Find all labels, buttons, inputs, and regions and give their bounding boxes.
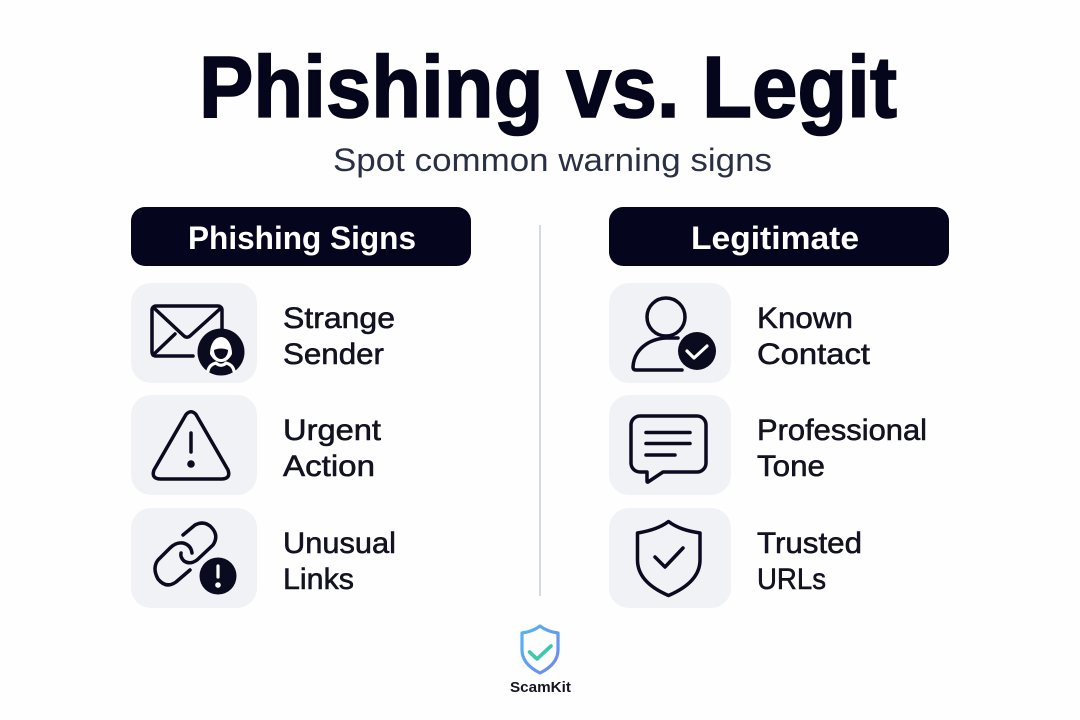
row: strange sender <box>131 283 395 383</box>
label: Contact <box>757 338 871 371</box>
icon: shield with check <box>638 522 700 596</box>
row: known contact <box>609 283 871 383</box>
label: Professional <box>757 414 927 447</box>
row: professional tone <box>609 395 927 495</box>
icon: person with check <box>633 298 716 370</box>
heading: legitimate: Legitimate <box>691 220 859 256</box>
row: unusual links <box>131 508 396 608</box>
icon: speech bubble <box>631 416 706 482</box>
label <box>283 414 382 483</box>
row: urgent action <box>131 395 382 495</box>
title: Phishing vs. Legit <box>199 39 897 136</box>
label: Known <box>757 302 853 335</box>
icon: warning triangle <box>153 412 229 479</box>
label: Links <box>283 563 354 596</box>
heading: phishing signs <box>131 207 471 266</box>
center divider <box>539 225 541 596</box>
label <box>283 527 396 596</box>
heading: phishing signs: Phishing Signs <box>188 220 416 256</box>
icon: broken chain link with alert <box>155 523 236 594</box>
icon: envelope with hooded sender <box>152 306 244 376</box>
label <box>757 414 927 483</box>
heading: legitimate <box>609 207 949 266</box>
label: Unusual <box>283 527 396 560</box>
subtitle: Spot common warning signs <box>333 142 772 178</box>
label <box>757 302 871 371</box>
label: Urgent <box>283 414 382 447</box>
logo: ScamKit <box>510 626 571 696</box>
logo: ScamKit: ScamKit <box>510 679 571 696</box>
label: Trusted <box>757 527 862 560</box>
icon: gradient shield <box>522 626 558 673</box>
row: trusted urls <box>609 508 862 608</box>
panel: phishing signs <box>131 207 471 608</box>
panel: legitimate <box>609 207 949 608</box>
label: Action <box>283 450 375 483</box>
label <box>283 302 395 371</box>
label <box>757 527 862 596</box>
label: URLs <box>757 563 826 596</box>
label: Strange <box>283 302 395 335</box>
label: Sender <box>283 338 384 371</box>
label: Tone <box>757 450 825 483</box>
